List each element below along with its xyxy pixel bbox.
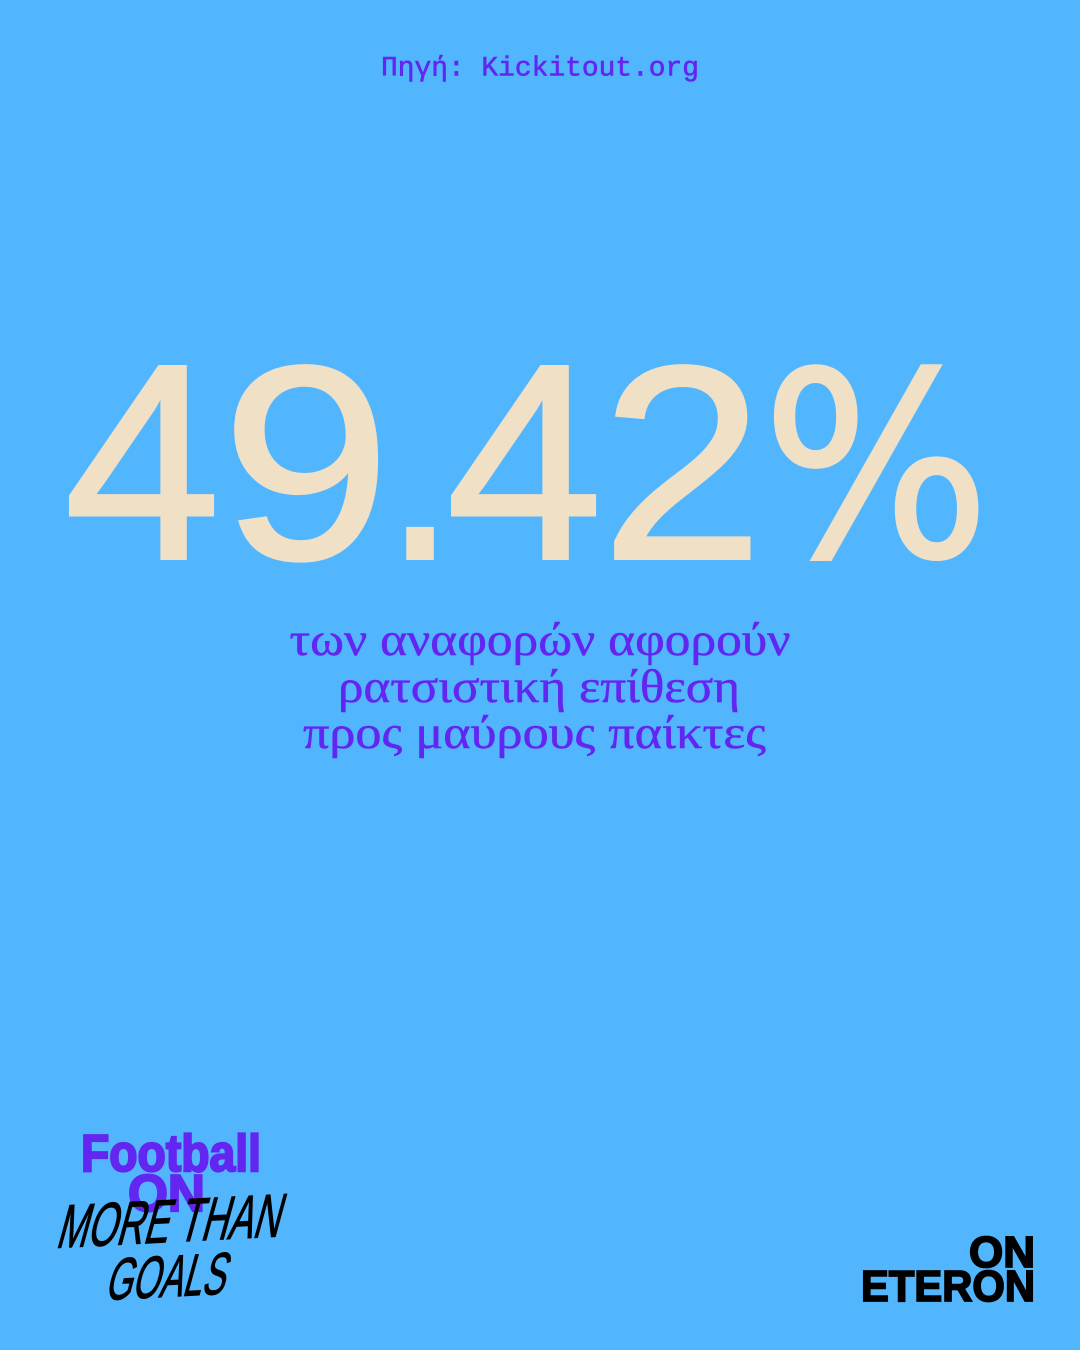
logo: Football ON More Than Goals: Football: [81, 1125, 261, 1183]
logo: Football ON More Than Goals: [51, 1125, 294, 1314]
logo: ON ETERON: ON: [969, 1228, 1035, 1277]
description text: των αναφορών αφορούν: [290, 614, 790, 666]
main statistic: %: [762, 318, 990, 617]
description text: [290, 614, 790, 759]
logo: Football ON More Than Goals: MORE THAN: [51, 1181, 294, 1262]
logo: Football ON More Than Goals: ON: [128, 1165, 205, 1223]
main statistic: 4: [64, 307, 221, 618]
main statistic: 4: [446, 307, 603, 618]
main statistic: .: [384, 305, 456, 619]
main statistic: [64, 305, 990, 619]
description text: προς μαύρους παίκτες: [303, 707, 766, 759]
main statistic: 2: [601, 309, 764, 618]
main statistic: 9: [222, 309, 391, 617]
logo: ON ETERON: ETERON: [861, 1262, 1035, 1311]
logo: Football ON More Than Goals: GOALS: [100, 1240, 238, 1314]
source line: Πηγή: Kickitout.org: [381, 54, 699, 84]
description text: ρατσιστική επίθεση: [338, 661, 740, 713]
logo: ON ETERON: [861, 1228, 1035, 1311]
